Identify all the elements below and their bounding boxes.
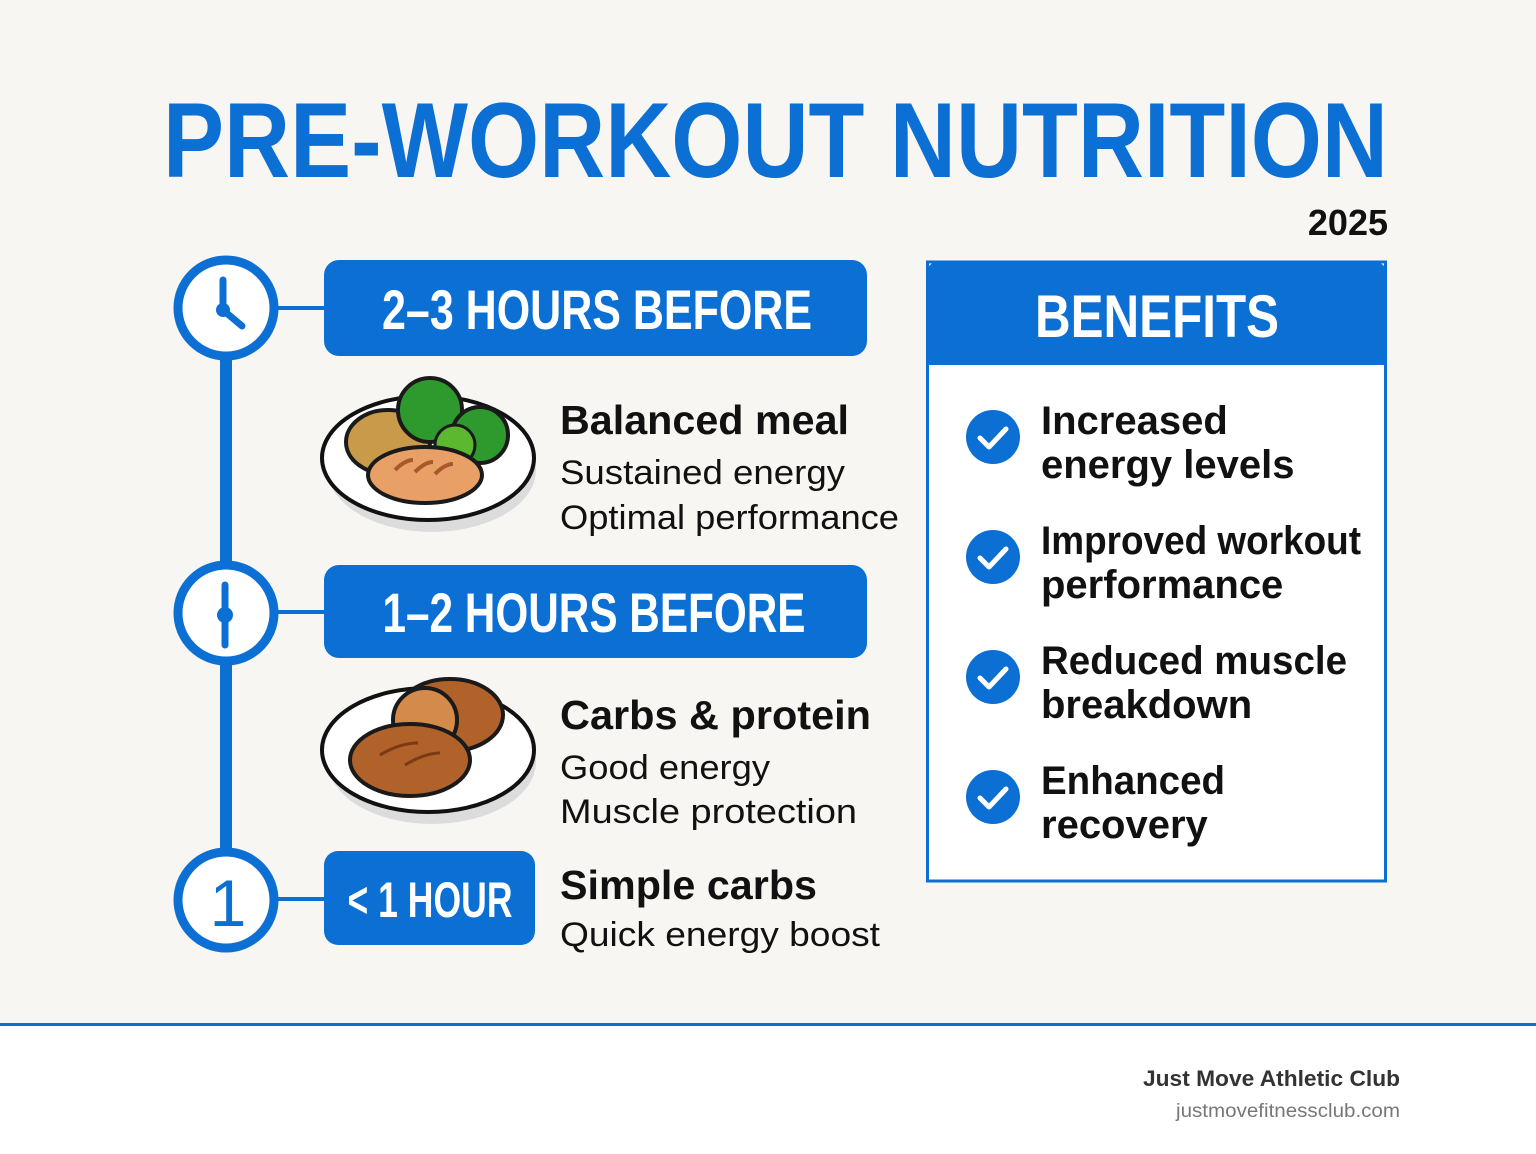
benefit 1: energy levels xyxy=(1041,443,1294,487)
footer: justmovefitnessclub.com xyxy=(1175,1101,1400,1122)
text: balanced meal xyxy=(560,397,899,537)
heading: 1-2 hours: 1–2 HOURS BEFORE xyxy=(382,581,806,644)
icon: balanced meal plate xyxy=(322,378,536,532)
benefit 3: Reduced muscle xyxy=(1041,639,1347,683)
heading: under 1 hour xyxy=(324,851,535,945)
icon: clock 3: 1 xyxy=(210,866,246,940)
text: simple carbs: Simple carbs xyxy=(560,862,817,908)
heading: 2-3 hours: 2–3 HOURS BEFORE xyxy=(382,278,812,341)
icon: clock 3 xyxy=(178,852,326,948)
benefit 3: breakdown xyxy=(1041,683,1252,727)
benefit 2 xyxy=(966,519,1361,607)
text: carbs and protein: Good energy xyxy=(560,749,770,787)
timeline xyxy=(178,260,326,948)
heading: under 1 hour: < 1 HOUR xyxy=(348,872,512,928)
benefit 3 xyxy=(966,639,1347,727)
heading: 2-3 hours xyxy=(324,260,867,356)
footer xyxy=(1143,1066,1400,1122)
benefit 1 xyxy=(966,399,1294,487)
text: balanced meal: Optimal performance xyxy=(560,499,899,537)
icon: clock 2 xyxy=(178,565,326,661)
benefit 1: Increased xyxy=(1041,399,1228,443)
benefit 2: performance xyxy=(1041,563,1283,607)
heading: benefits: BENEFITS xyxy=(1035,283,1279,350)
benefit 4 xyxy=(966,759,1225,847)
benefit 2: Improved workout xyxy=(1041,519,1361,563)
benefit 4: Enhanced xyxy=(1041,759,1225,803)
text: simple carbs: Quick energy boost xyxy=(560,916,881,954)
benefit 4: recovery xyxy=(1041,803,1209,847)
text: carbs and protein: Muscle protection xyxy=(560,793,857,831)
text: balanced meal: Balanced meal xyxy=(560,397,849,443)
text: simple carbs xyxy=(560,862,881,954)
text: carbs and protein: Carbs & protein xyxy=(560,692,871,738)
text: balanced meal: Sustained energy xyxy=(560,454,845,492)
icon: clock 1 xyxy=(178,260,326,356)
text: carbs and protein xyxy=(560,692,871,831)
heading: 1-2 hours xyxy=(324,565,867,658)
footer: Just Move Athletic Club xyxy=(1143,1066,1400,1091)
panel: benefits xyxy=(926,262,1387,881)
icon: carbs and protein plate xyxy=(322,679,536,824)
year: 2025 xyxy=(1308,202,1388,243)
